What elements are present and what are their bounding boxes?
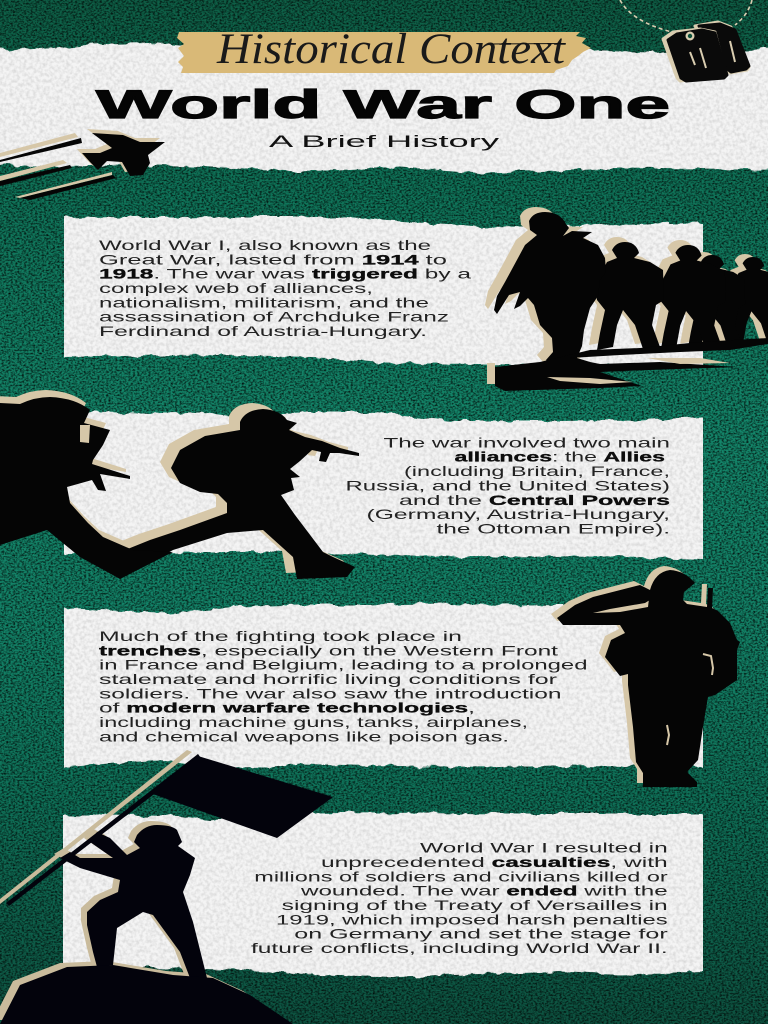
text block: intro: World War I, also known as the [99,237,431,253]
text block: trenches: Much of the fighting took place in [99,628,462,644]
text block: intro: assassination of Archduke Franz [99,309,449,325]
title: World War One [96,83,670,127]
text block: outcome [251,840,668,956]
illustration: saluting soldier [551,566,740,787]
text block: alliances [346,434,670,536]
text block: alliances: (including Britain, France, [404,463,670,479]
text block: outcome: on Germany and set the stage for [294,926,668,942]
text block: outcome: millions of soldiers and civilians killed or [254,868,668,884]
heading: Historical Context: Historical Context [216,26,566,73]
text block: intro: Great War, lasted from 1914 to [99,251,447,267]
text block: intro: Ferdinand of Austria-Hungary. [99,323,427,339]
ground shadow [495,338,768,391]
text block: intro [99,237,471,339]
text block: alliances: and the Central Powers [399,492,670,508]
illustration: soldier raising flag on hill [0,750,333,1024]
text block: outcome: 1919, which imposed harsh penalties [276,911,668,927]
text block: alliances: alliances : the Allies [454,449,665,465]
text block: alliances: Russia, and the United States) [346,477,670,493]
text block: trenches: including machine guns, tanks, airplanes, [99,714,528,730]
panel: trenches paper [64,603,703,768]
icon: dog tags [620,0,752,81]
text block: outcome: future conflicts, including World War II. [251,940,668,956]
text block: intro: nationalism, militarism, and the [99,294,429,310]
panel: alliances paper [64,411,703,560]
text block: intro: complex web of alliances, [99,280,373,296]
panel: outcome paper [63,812,703,977]
subtitle: A Brief History [269,132,500,151]
text block: outcome: signing of the Treaty of Versailles in [282,897,668,913]
text block: trenches [99,628,588,744]
panel: intro paper [64,216,703,366]
illustration: marching soldiers [485,207,768,391]
text block: trenches: in France and Belgium, leading to a prolonged [99,657,588,673]
text block: alliances: (Germany, Austria-Hungary, [366,506,670,522]
text block: outcome: unprecedented casualties , with [321,854,668,870]
text block: alliances: the Ottoman Empire). [436,520,670,536]
tape: heading label [177,32,591,73]
text block: trenches: trenches , especially on the Western Front [99,642,558,658]
illustration: running soldiers [0,390,359,579]
text block: trenches: stalemate and horrific living conditions for [99,671,558,687]
text block: outcome: World War I resulted in [420,840,668,856]
text block: trenches: and chemical weapons like poison gas. [99,728,509,744]
panel: header paper strip [0,43,768,173]
text block: outcome: wounded. The war ended with the [299,883,668,899]
text block: alliances: The war involved two main [384,434,670,450]
text block: trenches: of modern warfare technologies , [99,700,475,716]
text block: trenches: soldiers. The war also saw the introduction [99,685,562,701]
text block: intro: 1918 . The war was triggered by a [99,266,471,282]
icon: fighter jet with contrails [0,129,165,200]
